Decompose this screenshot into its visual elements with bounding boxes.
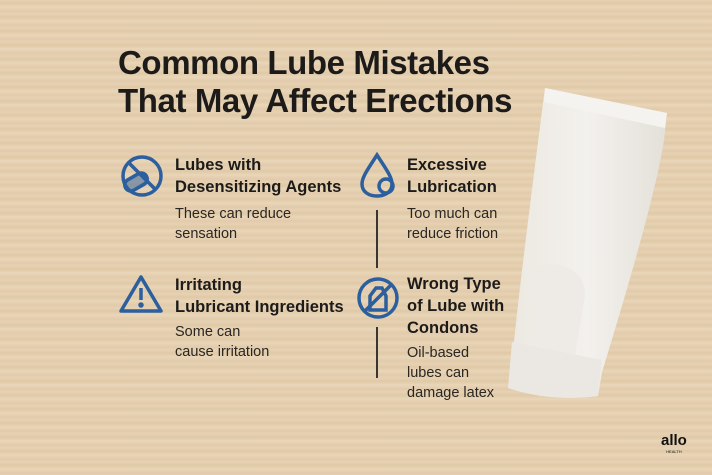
description: damage latex [407,385,494,401]
title [118,44,512,119]
description: Too much can [407,206,497,222]
heading: Lubricant Ingredients [175,298,344,316]
description: reduce friction [407,226,498,242]
item: excessive lubrication [360,152,498,242]
description [175,206,291,242]
title: Common Lube Mistakes [118,44,490,81]
heading: Wrong Type [407,275,501,293]
heading: Lubrication [407,178,497,196]
heading [407,275,504,337]
item: wrong type with condoms [357,275,504,401]
description [407,345,494,401]
description: lubes can [407,365,469,381]
description: Oil-based [407,345,469,361]
heading: Irritating [175,276,242,294]
icon: pill crossed [121,155,163,197]
heading: Lubes with [175,156,261,174]
heading: Condons [407,319,478,337]
description: cause irritation [175,344,269,360]
logo: allo: allo [661,432,687,449]
description: Some can [175,324,240,340]
title: That May Affect Erections [118,82,512,119]
heading: of Lube with [407,297,504,315]
product tube [508,88,667,398]
logo: allo: HEALTH [666,449,682,454]
icon: bottle crossed [357,277,399,319]
item: irritating ingredients [119,275,344,360]
description: These can reduce [175,206,291,222]
heading [175,156,341,196]
description: sensation [175,226,237,242]
heading: Desensitizing Agents [175,178,341,196]
icon: drops [360,152,395,198]
heading: Excessive [407,156,487,174]
item: desensitizing agents [121,155,341,242]
icon: warning [119,275,163,313]
description [407,206,498,242]
description [175,324,269,360]
heading [175,276,344,316]
heading [407,156,497,196]
